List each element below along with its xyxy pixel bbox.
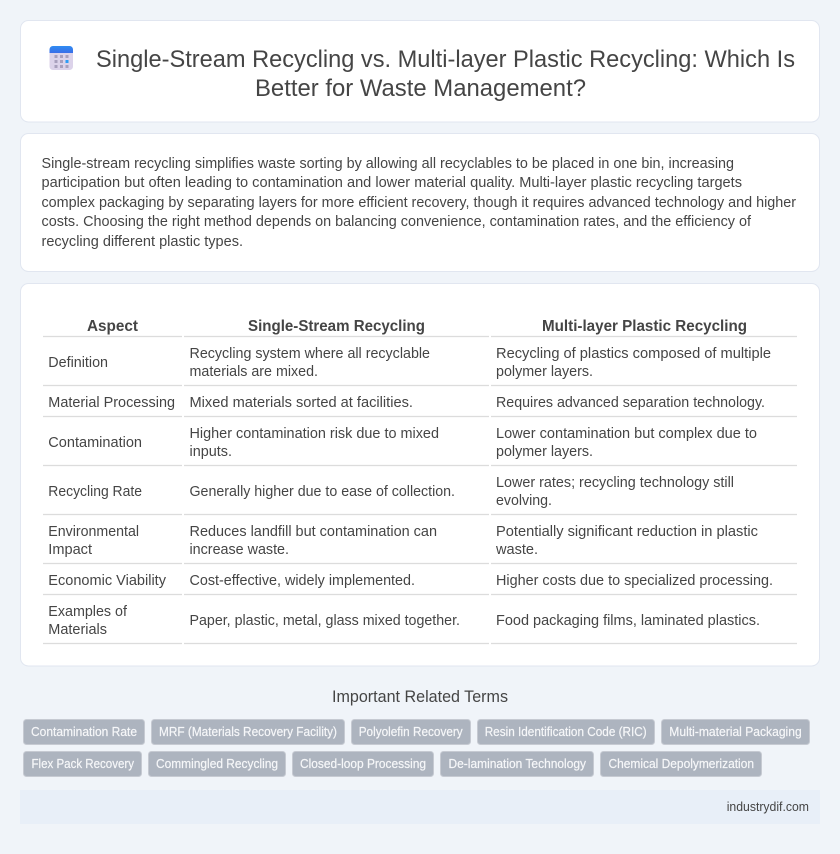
chip: de-lamination technology: De-lamination Technology xyxy=(448,757,587,771)
row: environmental impact: Reduces landfill but contamination can xyxy=(190,524,437,540)
chip: chemical depolymerization: Chemical Depolymerization xyxy=(608,757,754,771)
row: environmental impact: waste. xyxy=(495,542,538,558)
chip: multi-material packaging xyxy=(662,720,810,744)
intro text xyxy=(42,156,796,250)
title: Single-Stream Recycling vs. Multi-layer Plastic Recycling: Which Is xyxy=(96,46,795,73)
chip: closed-loop processing xyxy=(292,752,434,776)
row: material processing: Mixed materials sorted at facilities. xyxy=(190,395,413,411)
table header: Single-Stream Recycling xyxy=(248,318,425,335)
row: economic viability: Cost-effective, widely implemented. xyxy=(190,573,415,589)
intro text: costs. Choosing the right method depends on balancing convenience, contamination rates, and the efficiency of xyxy=(42,214,752,230)
chip: commingled recycling xyxy=(148,752,286,776)
row: contamination: inputs. xyxy=(190,444,232,460)
chip: polyolefin recovery xyxy=(352,720,470,744)
chip: closed-loop processing: Closed-loop Processing xyxy=(300,757,426,771)
row: recycling rate xyxy=(48,475,734,509)
table header xyxy=(87,318,747,335)
intro text: complex packaging by separating layers for more efficient recovery, though it requires advanced technology and higher xyxy=(42,195,796,211)
chip: flex pack recovery xyxy=(24,752,142,776)
row: economic viability: Economic Viability xyxy=(48,573,167,589)
row: contamination: Contamination xyxy=(48,435,142,451)
intro text: participation but often leading to contamination and lower material quality. Multi-layer plastic recycling targets xyxy=(42,175,742,191)
row: environmental impact: increase waste. xyxy=(190,542,289,558)
row: definition: Recycling system where all recyclable xyxy=(190,346,430,362)
row: recycling rate: Recycling Rate xyxy=(48,484,142,500)
row: contamination: Higher contamination risk due to mixed xyxy=(190,426,439,442)
row: environmental impact: Environmental xyxy=(48,524,139,540)
footer: industrydif.com xyxy=(727,799,809,814)
row: examples of materials: Examples of xyxy=(48,604,128,620)
row: examples of materials: Paper, plastic, metal, glass mixed together. xyxy=(190,613,460,629)
row: definition: Recycling of plastics composed of multiple xyxy=(496,346,771,362)
row: examples of materials xyxy=(48,604,760,638)
chip: MRF: MRF (Materials Recovery Facility) xyxy=(159,725,337,739)
row: recycling rate: evolving. xyxy=(496,493,552,509)
intro text: Single-stream recycling simplifies waste sorting by allowing all recyclables to be placed in one bin, increasing xyxy=(42,156,734,172)
row: definition: Definition xyxy=(48,355,108,371)
row: recycling rate: Lower rates; recycling technology still xyxy=(496,475,734,491)
row: examples of materials: Materials xyxy=(48,622,107,638)
row: economic viability: Higher costs due to specialized processing. xyxy=(496,573,773,589)
footer xyxy=(20,790,820,824)
row: examples of materials: Food packaging films, laminated plastics. xyxy=(496,613,760,629)
chip: MRF xyxy=(152,720,344,744)
chip: multi-material packaging: Multi-material Packaging xyxy=(669,725,802,739)
row: contamination: polymer layers. xyxy=(496,444,593,460)
chip: polyolefin recovery: Polyolefin Recovery xyxy=(359,725,463,739)
icon: calendar xyxy=(50,46,73,70)
intro panel xyxy=(20,134,820,272)
title xyxy=(96,46,795,102)
row: material processing: Requires advanced separation technology. xyxy=(496,395,765,411)
chip: de-lamination technology xyxy=(440,752,594,776)
row: definition: materials are mixed. xyxy=(190,364,318,380)
row: definition: polymer layers. xyxy=(496,364,593,380)
row: environmental impact: Impact xyxy=(48,542,92,558)
row: contamination: Lower contamination but complex due to xyxy=(496,426,757,442)
row: definition xyxy=(48,346,771,380)
related terms chips xyxy=(24,720,810,776)
chip: contamination rate xyxy=(24,720,144,744)
chip: contamination rate: Contamination Rate xyxy=(31,725,137,739)
chip: resin identification code: Resin Identification Code (RIC) xyxy=(485,725,647,739)
intro text: recycling different plastic types. xyxy=(42,234,243,250)
row: environmental impact xyxy=(48,524,758,558)
comparison table panel xyxy=(20,284,820,666)
row: economic viability xyxy=(48,573,773,589)
row: contamination xyxy=(48,426,757,460)
title: Better for Waste Management? xyxy=(255,75,586,102)
related terms heading: Important Related Terms xyxy=(332,688,508,706)
chip: resin identification code xyxy=(478,720,654,744)
header panel xyxy=(20,20,820,122)
row: recycling rate: Generally higher due to ease of collection. xyxy=(190,484,455,500)
row: material processing xyxy=(48,395,765,411)
chip: commingled recycling: Commingled Recycling xyxy=(156,757,278,771)
row: environmental impact: Potentially significant reduction in plastic xyxy=(496,524,758,540)
table header: Multi-layer Plastic Recycling xyxy=(542,318,747,335)
chip: flex pack recovery: Flex Pack Recovery xyxy=(32,757,135,771)
chip: chemical depolymerization xyxy=(600,752,762,776)
table header: Aspect xyxy=(87,318,138,335)
row: material processing: Material Processing xyxy=(48,395,175,411)
